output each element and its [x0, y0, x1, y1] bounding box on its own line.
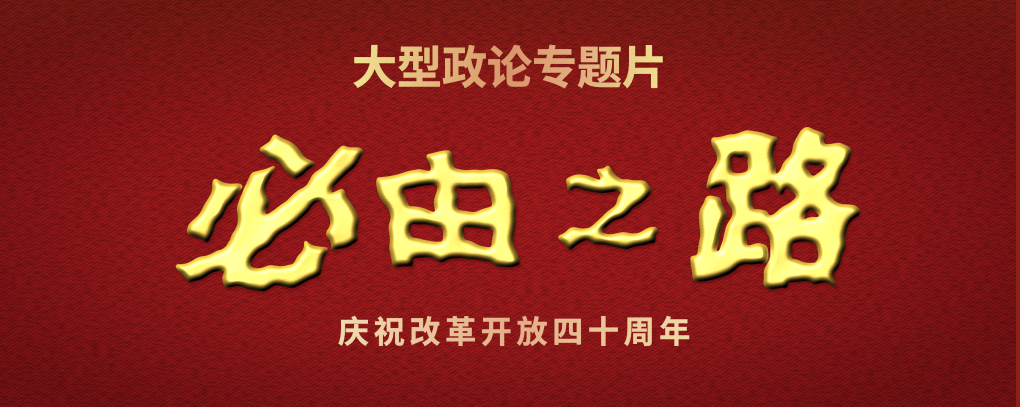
character: 由: 由 — [362, 143, 536, 280]
character: 必: 必 — [163, 127, 391, 311]
heading: 大型政论专题片: 大型政论专题片 — [352, 42, 667, 94]
calligraphy title: 必由之路 — [163, 122, 871, 311]
character: 路: 路 — [681, 122, 871, 306]
character: 之: 之 — [559, 162, 659, 257]
subheading: 庆祝改革开放四十周年: 庆祝改革开放四十周年 — [338, 315, 695, 350]
